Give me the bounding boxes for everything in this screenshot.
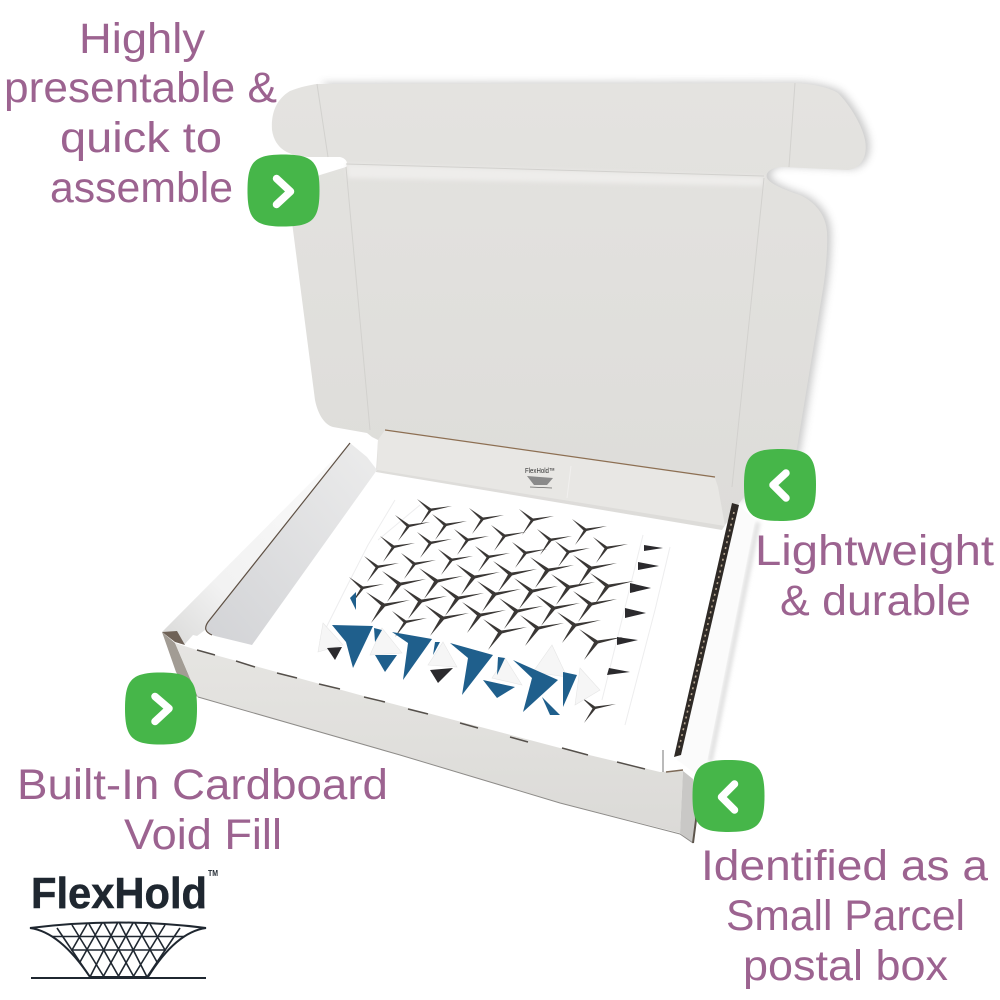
FlexHold logo: FlexHold — [31, 869, 207, 918]
callout: void fill: Built-In Cardboard — [17, 761, 388, 809]
callout: highly presentable: Highly — [79, 15, 206, 63]
wall corner brown edge — [162, 631, 185, 645]
dark shadow triangles — [327, 545, 663, 683]
wall inner lip — [184, 635, 663, 772]
icon: green arrow left, right side — [744, 449, 816, 521]
wall right side face — [680, 771, 696, 843]
callout: small parcel: postal box — [743, 942, 949, 990]
box right flap — [677, 505, 758, 773]
corrugated right edge — [674, 503, 739, 757]
folded paper pyramids — [318, 623, 600, 705]
callout: small parcel: Identified as a — [701, 842, 988, 890]
mini logo — [525, 466, 555, 488]
FlexHold void fill sheet — [318, 499, 670, 725]
callout: lightweight — [755, 527, 994, 625]
lid highlight band — [346, 164, 764, 186]
left flap and inner wall — [162, 443, 377, 645]
callout: small parcel: Small Parcel — [726, 892, 965, 940]
wall face — [175, 643, 683, 833]
callout: void fill: Void Fill — [124, 811, 282, 859]
box front wall — [162, 631, 696, 843]
callout: highly presentable — [4, 15, 277, 212]
lid fold lines — [317, 83, 795, 487]
FlexHold logo: TM — [208, 869, 218, 878]
box lid — [272, 82, 870, 530]
icon: green arrow left, front corner — [692, 760, 764, 832]
callout: highly presentable: presentable & — [4, 64, 277, 112]
callout: highly presentable: assemble — [50, 164, 233, 212]
back flap with label — [377, 430, 725, 526]
FlexHold logo — [30, 869, 218, 978]
mini logo: FlexHold™ — [525, 466, 555, 475]
front wall slits — [197, 650, 645, 769]
callout: lightweight: Lightweight — [755, 527, 994, 575]
wall left side face — [162, 632, 198, 697]
icon: green arrow right, lid — [248, 154, 320, 226]
slit pattern — [349, 499, 634, 723]
blue triangles of product beneath — [332, 592, 577, 715]
logo lattice — [30, 922, 206, 978]
callout: void fill — [17, 761, 388, 859]
callout: lightweight: & durable — [780, 577, 971, 625]
callout: highly presentable: quick to — [60, 114, 222, 162]
callout: small parcel — [701, 842, 988, 990]
icon: green arrow right, void fill — [125, 672, 197, 744]
